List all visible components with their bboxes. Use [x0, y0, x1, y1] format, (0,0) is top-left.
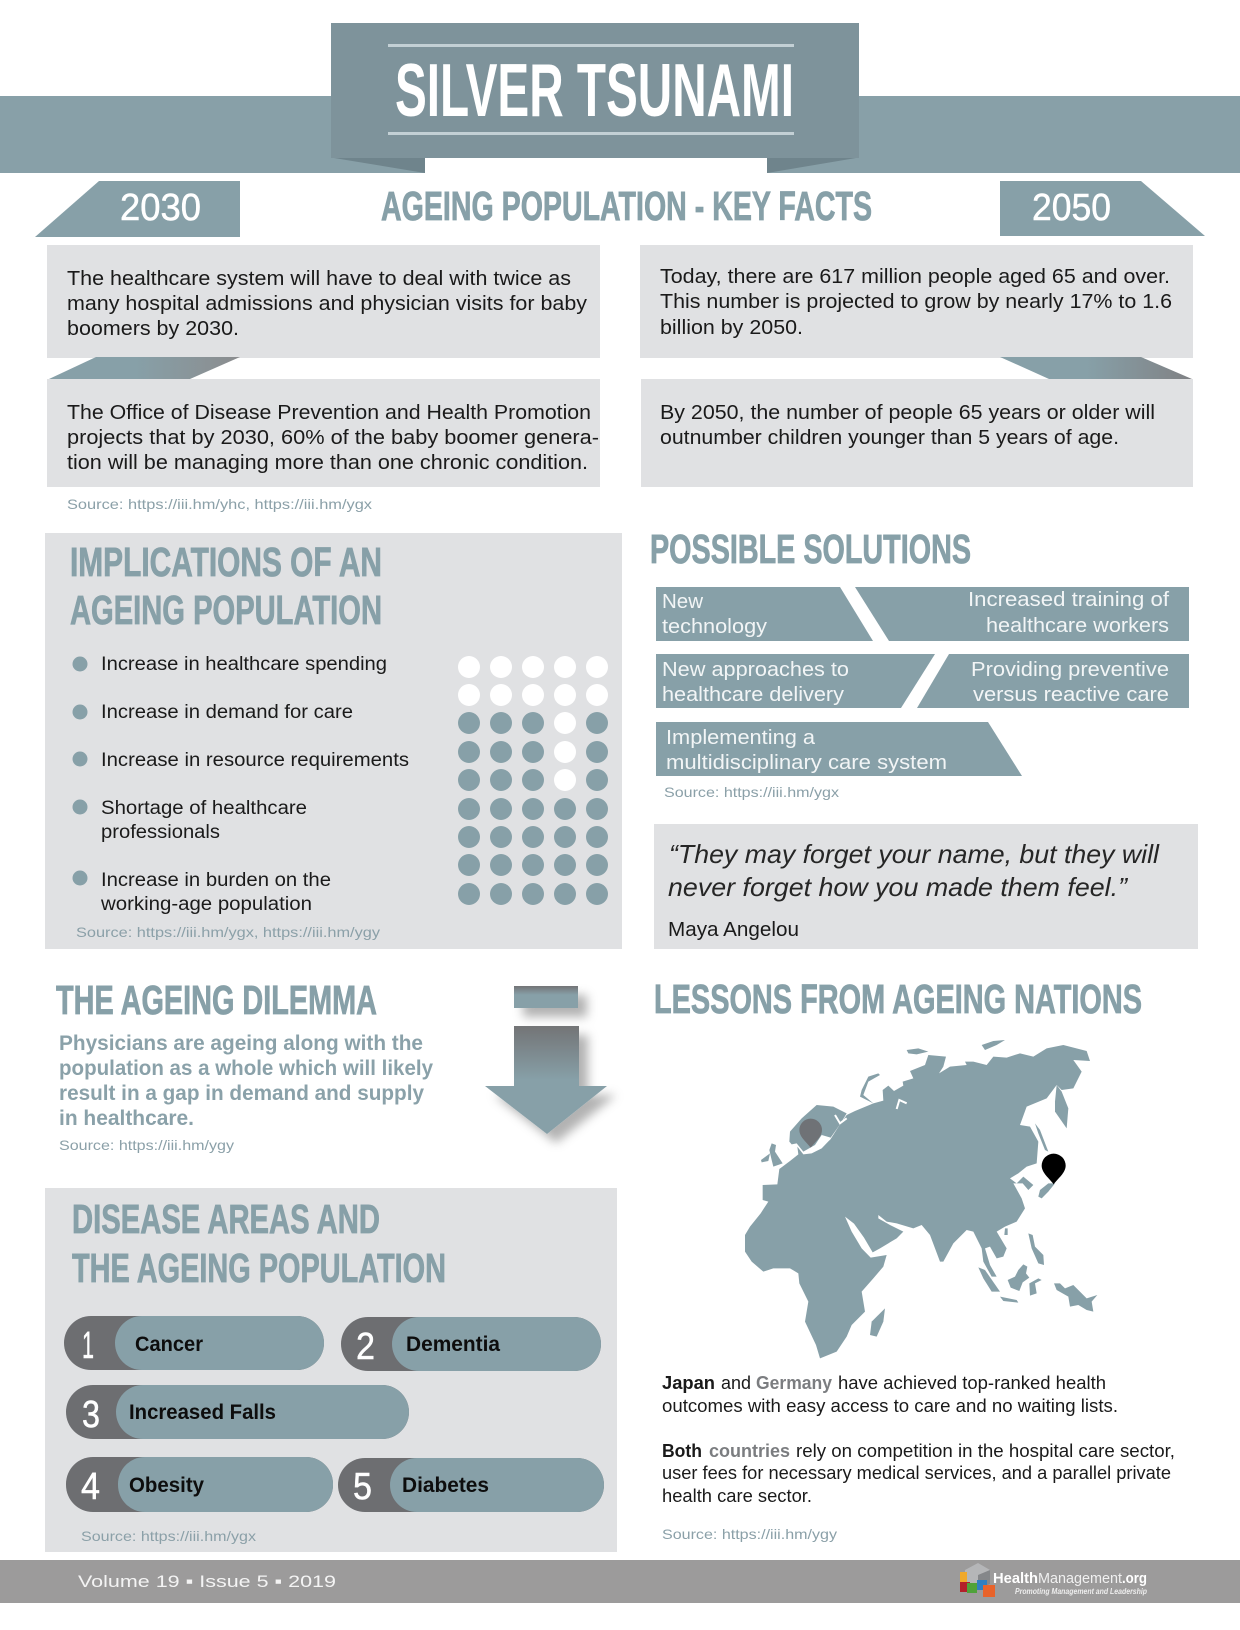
source: implications: Source: https://iii.hm/ygx, https://iii.hm/ygy	[76, 924, 380, 940]
pin: germany	[799, 1119, 822, 1148]
solution: new technology: New	[662, 591, 704, 613]
panel: 2030 fact two	[47, 379, 600, 487]
logo: .org	[1122, 1570, 1147, 1587]
solution: preventive care: versus reactive care	[973, 684, 1169, 706]
text: lessons paragraph two	[662, 1441, 1175, 1506]
solutions block	[656, 587, 1189, 776]
panel: 2030 fact two: projects that by 2030, 60% of the baby boomer genera-	[67, 427, 599, 449]
panel: 2030 fact one: boomers by 2030.	[67, 318, 239, 340]
panel: 2050 fact two: outnumber children younger than 5 years of age.	[660, 427, 1119, 449]
solution: new technology	[656, 587, 873, 641]
text: lessons paragraph two: Both	[662, 1441, 702, 1461]
panel: 2050 fact two	[641, 379, 1193, 487]
ribbon folds	[334, 158, 856, 173]
header ribbon band	[0, 96, 1240, 173]
heading: the ageing dilemma: THE AGEING DILEMMA	[56, 977, 377, 1023]
heading: disease areas: THE AGEING POPULATION	[72, 1245, 446, 1291]
bullet list: Increase in healthcare spending	[101, 654, 387, 675]
pill: increased falls: Increased Falls	[129, 1401, 276, 1424]
heading: implications: AGEING POPULATION	[70, 587, 382, 633]
text: lessons paragraph one: have achieved top-ranked health	[838, 1373, 1106, 1393]
panel: disease areas	[45, 1188, 617, 1552]
map: eurasia and africa	[745, 1040, 1097, 1358]
text: dilemma paragraph	[59, 1032, 433, 1130]
panel: 2030 fact one	[47, 245, 600, 358]
arrow: down	[485, 986, 607, 1134]
tag: 2050	[1000, 181, 1205, 236]
pill: dementia: 2	[356, 1326, 375, 1368]
footer issue text: Volume 19 ▪ Issue 5 ▪ 2019	[78, 1572, 336, 1591]
inlets	[812, 1100, 907, 1152]
logo	[960, 1563, 1147, 1597]
solution: training: Increased training of	[968, 589, 1169, 611]
pill: dementia: Dementia	[406, 1333, 500, 1356]
panel: 2050 fact two: By 2050, the number of people 65 years or older will	[660, 402, 1155, 424]
source: dilemma: Source: https://iii.hm/ygy	[59, 1137, 234, 1153]
ribbon fold: left	[49, 357, 240, 379]
pill: cancer	[64, 1316, 324, 1370]
panel: 2030 fact two: tion will be managing more than one chronic condition.	[67, 452, 588, 474]
text: lessons paragraph one: Japan	[662, 1373, 715, 1393]
title: SILVER TSUNAMI	[395, 48, 794, 132]
text: lessons paragraph two: health care sector.	[662, 1486, 812, 1506]
pin: japan	[1042, 1154, 1066, 1184]
solution: multidisciplinary: Implementing a	[666, 727, 816, 749]
bullet list: Increase in demand for care	[101, 702, 353, 723]
solution: preventive care	[917, 654, 1189, 708]
text: lessons paragraph two: rely on competition in the hospital care sector,	[796, 1441, 1175, 1461]
solution: preventive care: Providing preventive	[971, 659, 1169, 681]
bullet list: Increase in burden on the	[101, 870, 331, 891]
pill: obesity: Obesity	[129, 1474, 204, 1497]
panel: quote: never forget how you made them feel.”	[668, 872, 1128, 902]
solution: training	[855, 587, 1189, 641]
footer bar	[0, 1560, 1240, 1603]
panel: 2030 fact one: The healthcare system will have to deal with twice as	[67, 268, 571, 290]
heading: key facts: AGEING POPULATION - KEY FACTS	[381, 183, 872, 229]
bullet list: working-age population	[100, 894, 312, 915]
pill: diabetes: 5	[353, 1466, 372, 1508]
source: lessons: Source: https://iii.hm/ygy	[662, 1526, 837, 1542]
panel: 2050 fact one: This number is projected to grow by nearly 17% to 1.6	[660, 291, 1172, 313]
pill: dementia	[341, 1317, 601, 1371]
panel: 2050 fact one	[640, 245, 1193, 358]
solution: multidisciplinary	[656, 722, 1022, 776]
panel: quote: Maya Angelou	[668, 919, 799, 941]
text: lessons paragraph one: outcomes with easy access to care and no waiting lists.	[662, 1396, 1118, 1416]
landmass	[745, 1045, 1090, 1358]
text: lessons paragraph two: countries	[709, 1441, 790, 1461]
panel: quote: “They may forget your name, but they will	[669, 839, 1160, 869]
bullet list: Increase in resource requirements	[101, 750, 409, 771]
pill: cancer: Cancer	[135, 1333, 203, 1356]
dot matrix chart	[458, 656, 608, 905]
title banner	[331, 23, 859, 173]
logo: Management	[1038, 1570, 1123, 1587]
panel: quote	[654, 824, 1198, 949]
logo: Health	[993, 1570, 1038, 1587]
text: dilemma paragraph: population as a whole which will likely	[59, 1057, 433, 1080]
logo: Promoting Management and Leadership	[1015, 1587, 1147, 1596]
heading: possible solutions: POSSIBLE SOLUTIONS	[650, 526, 971, 572]
pill: cancer: 1	[82, 1325, 94, 1367]
panel: 2050 fact one: Today, there are 617 million people aged 65 and over.	[660, 266, 1170, 288]
solution: new approaches	[656, 654, 935, 708]
panel: 2050 fact one: billion by 2050.	[660, 317, 803, 339]
tag: 2030	[35, 181, 240, 237]
heading: implications	[70, 539, 382, 633]
text: lessons paragraph one: and	[721, 1373, 751, 1393]
heading: disease areas: DISEASE AREAS AND	[72, 1196, 380, 1242]
text: dilemma paragraph: in healthcare.	[59, 1107, 194, 1130]
bullet list: professionals	[101, 822, 220, 843]
solution: new approaches: New approaches to	[662, 659, 849, 681]
pill: diabetes: Diabetes	[402, 1474, 489, 1497]
panel: implications	[45, 533, 622, 949]
text: lessons paragraph one: Germany	[756, 1373, 832, 1393]
solution: multidisciplinary: multidisciplinary care system	[666, 752, 947, 774]
pill: increased falls: 3	[82, 1394, 100, 1436]
solution: new technology: technology	[662, 616, 767, 638]
bullet list	[72, 654, 409, 915]
text: lessons paragraph two: user fees for necessary medical services, and a parallel private	[662, 1463, 1171, 1483]
solution: training: healthcare workers	[986, 615, 1169, 637]
tag: 2050: 2050	[1032, 187, 1111, 229]
pill: diabetes	[338, 1458, 604, 1512]
text: dilemma paragraph: Physicians are ageing along with the	[59, 1032, 423, 1055]
pill: obesity: 4	[81, 1466, 100, 1508]
heading: implications: IMPLICATIONS OF AN	[70, 539, 382, 585]
ribbon fold: right	[1000, 357, 1192, 379]
text: lessons paragraph one	[662, 1373, 1118, 1416]
solution: new approaches: healthcare delivery	[662, 684, 844, 706]
source: solutions: Source: https://iii.hm/ygx	[664, 784, 839, 800]
text: dilemma paragraph: result in a gap in demand and supply	[59, 1082, 424, 1105]
panel: 2030 fact one: many hospital admissions and physician visits for baby	[67, 293, 587, 315]
pill: obesity	[66, 1457, 333, 1512]
panel: 2030 fact two: The Office of Disease Prevention and Health Promotion	[67, 402, 591, 424]
tag: 2030: 2030	[120, 187, 201, 229]
source: key facts: Source: https://iii.hm/yhc, https://iii.hm/ygx	[67, 496, 372, 512]
bullet list: Shortage of healthcare	[101, 798, 307, 819]
heading: disease areas	[72, 1196, 446, 1291]
source: disease areas: Source: https://iii.hm/ygx	[81, 1528, 256, 1544]
pill: increased falls	[66, 1385, 409, 1439]
